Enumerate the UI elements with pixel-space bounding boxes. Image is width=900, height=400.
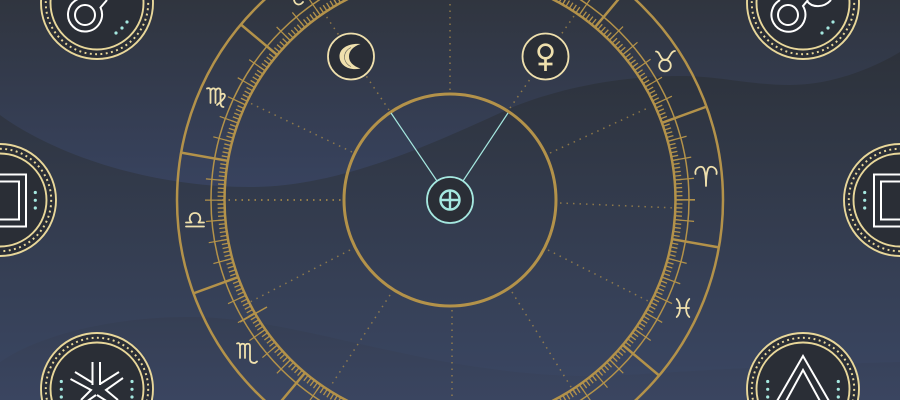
degree ticks xyxy=(221,0,679,400)
icon: taurus xyxy=(656,51,675,71)
inner tick ring xyxy=(224,0,676,400)
connector lines to earth xyxy=(391,113,508,181)
medallion: bottom right xyxy=(747,333,859,400)
dotted spokes xyxy=(250,3,676,400)
medallion: top right xyxy=(747,0,859,59)
five degree ticks xyxy=(215,0,685,400)
outer ring xyxy=(177,0,723,400)
icon: libra xyxy=(186,213,204,226)
icon: scorpio xyxy=(237,343,257,363)
sign dividers xyxy=(181,0,719,400)
planet: earth xyxy=(427,177,473,223)
central circle xyxy=(344,94,556,306)
medallion: middle left xyxy=(0,144,56,256)
medallion: top left xyxy=(41,0,153,59)
zodiac glyphs xyxy=(186,0,717,363)
planet: moon xyxy=(328,34,374,80)
long marker tick xyxy=(240,307,267,322)
zodiac wheel xyxy=(177,0,723,400)
icon: aries xyxy=(695,167,717,186)
planet: venus xyxy=(522,34,568,80)
icon: leo fragment xyxy=(294,0,303,4)
middle ring xyxy=(211,0,689,400)
medallion: bottom left xyxy=(41,333,153,400)
icon: pisces xyxy=(677,299,689,317)
icon: virgo xyxy=(207,88,225,107)
medallion: middle right xyxy=(844,144,900,256)
dotted spoke: left xyxy=(222,199,342,201)
